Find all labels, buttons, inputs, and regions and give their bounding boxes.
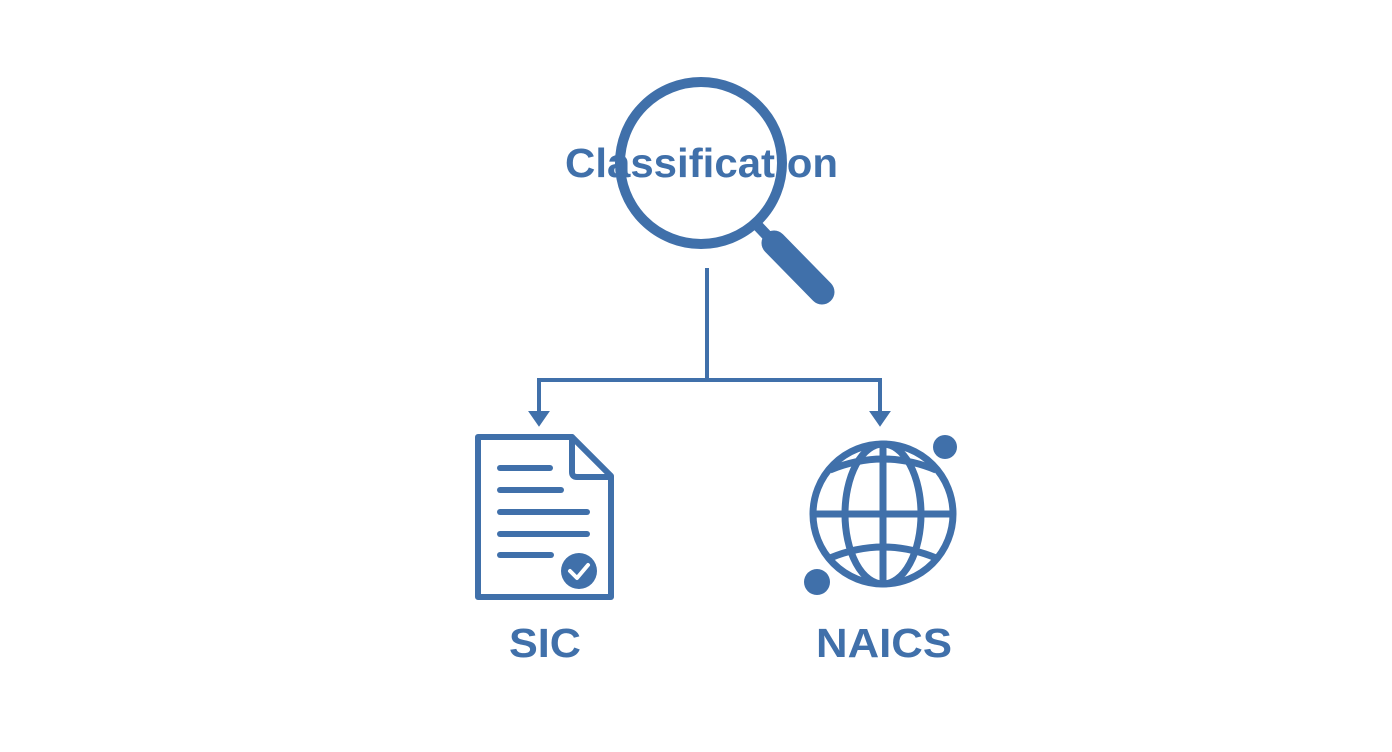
icon: globe — [804, 435, 957, 595]
label: SIC: SIC — [509, 620, 581, 666]
title: Classification — [565, 140, 838, 186]
icon: document with check — [478, 437, 611, 597]
label: NAICS: NAICS — [816, 620, 952, 666]
arrow: tree connector — [530, 268, 889, 425]
icon: magnifying glass — [620, 82, 822, 292]
